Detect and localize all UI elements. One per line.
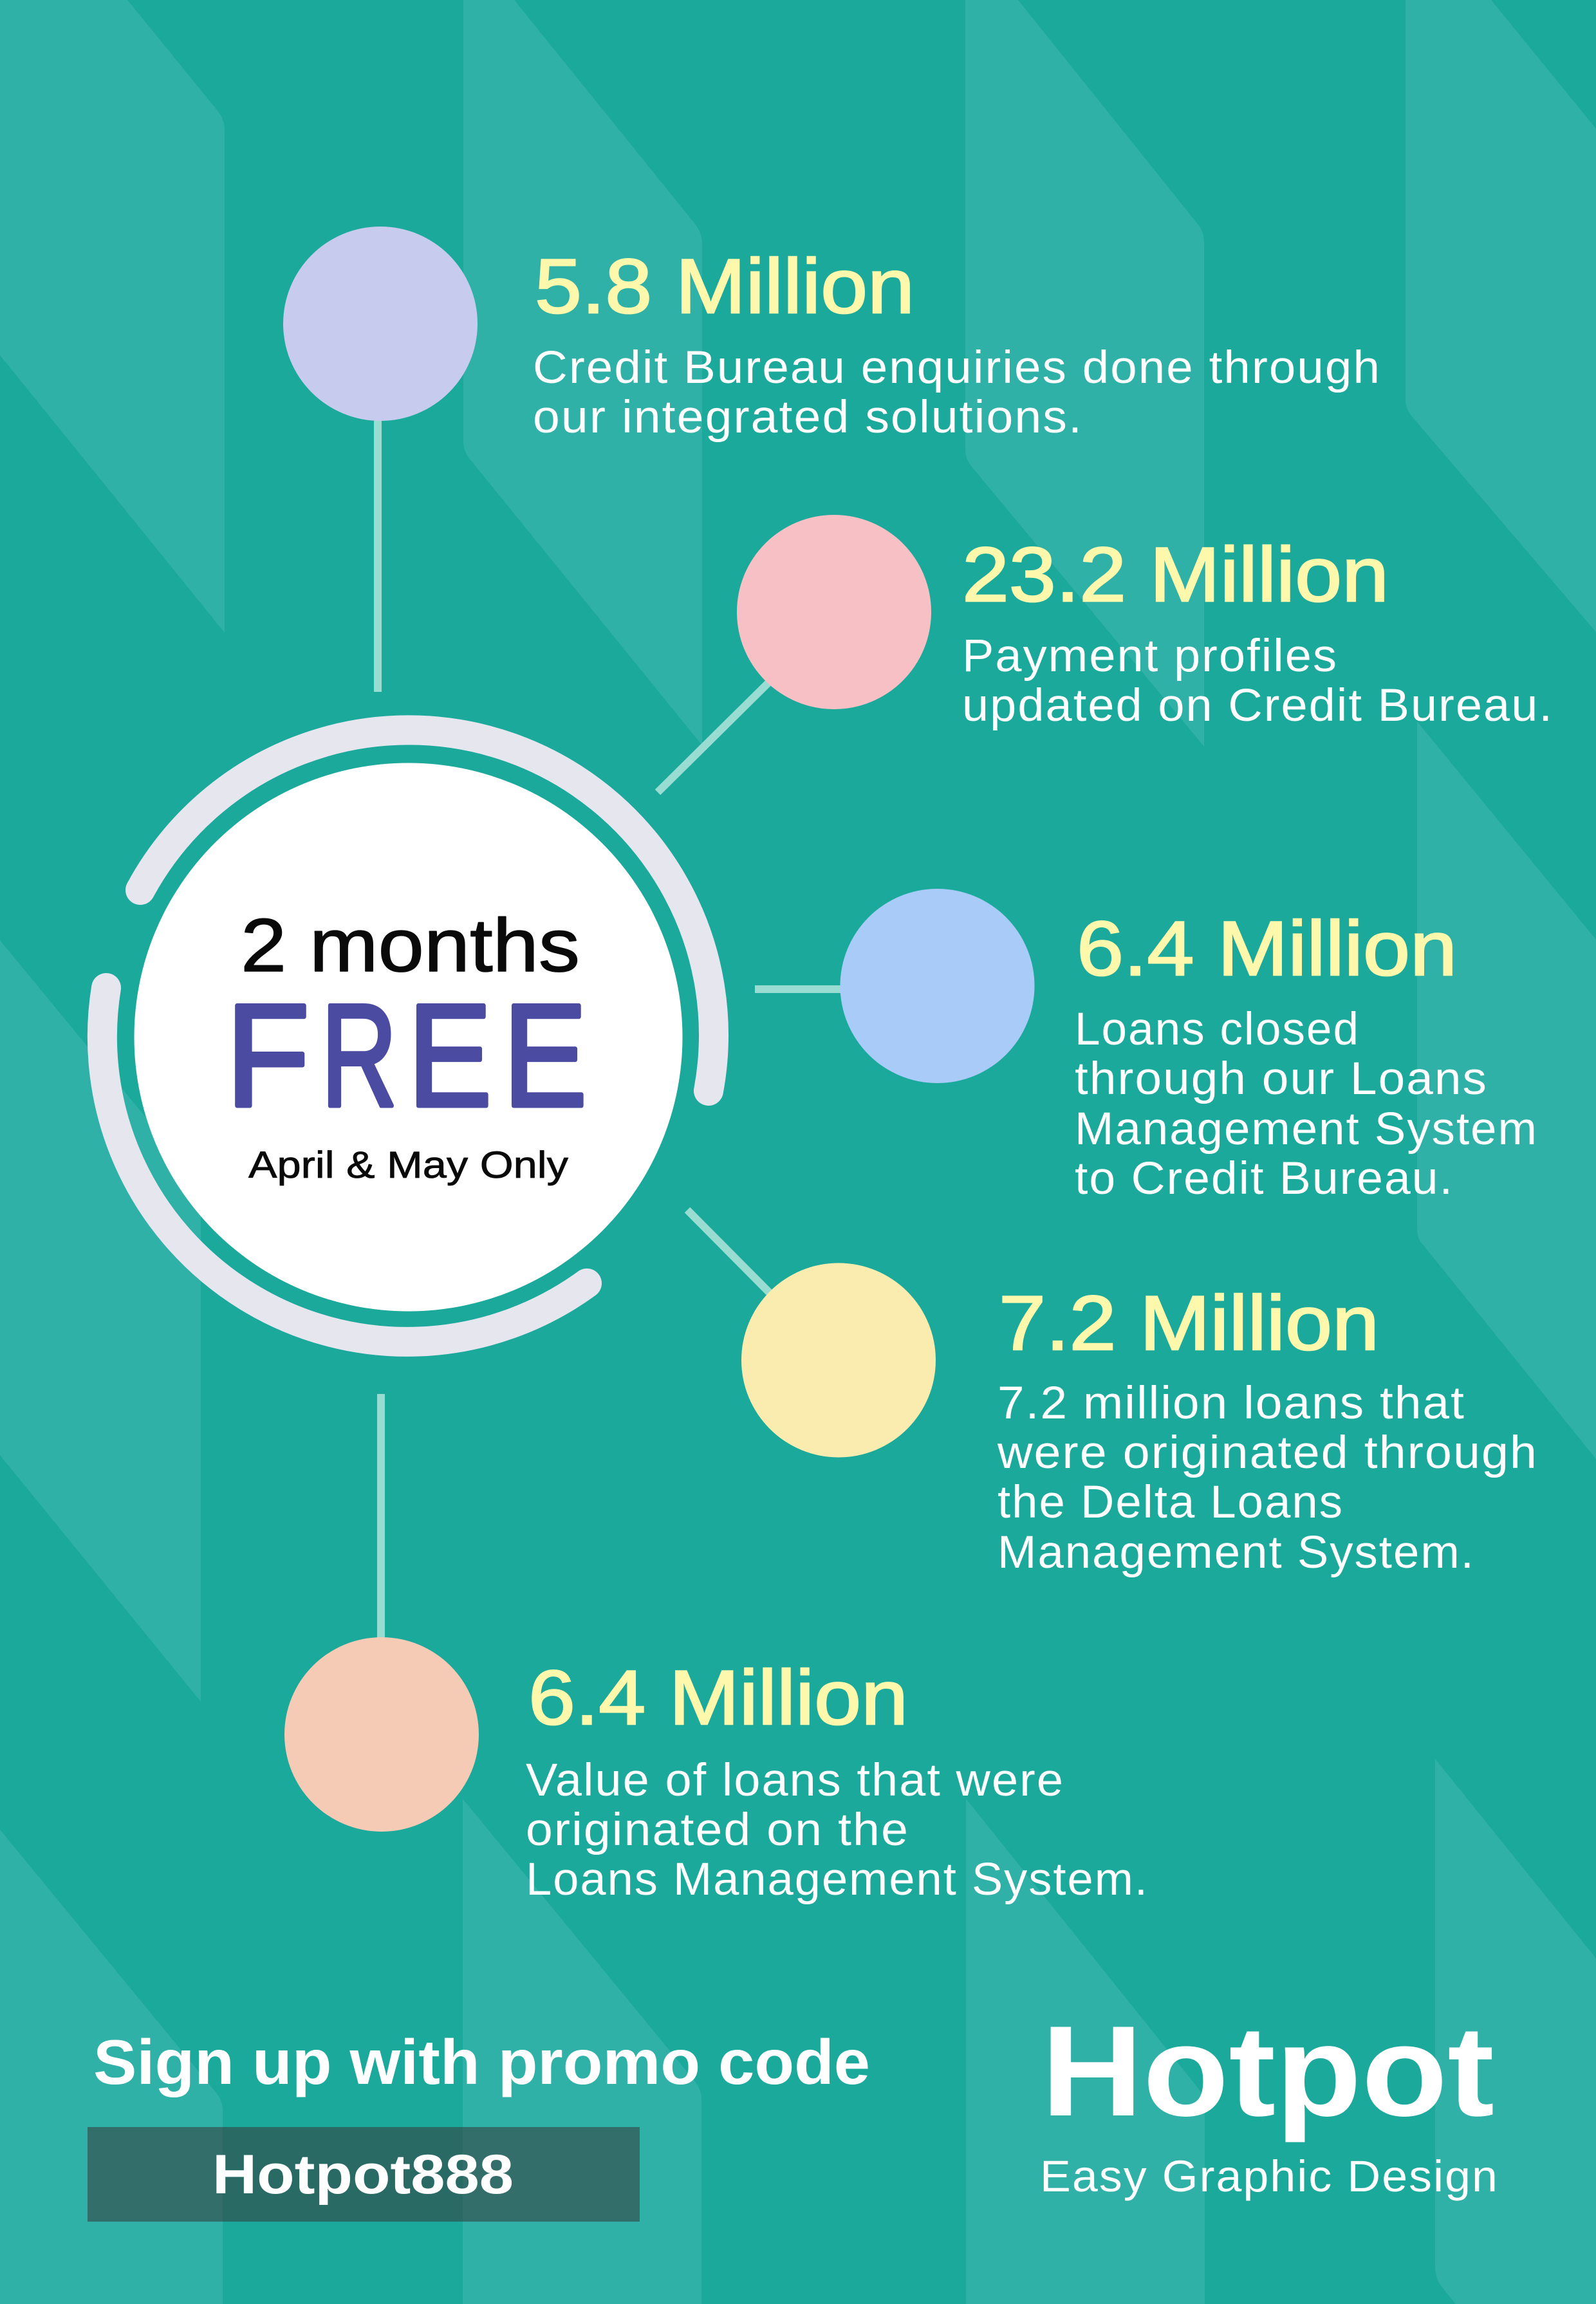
text: FREE: E bbox=[503, 974, 587, 1137]
brand name: Hotpot bbox=[1041, 2000, 1494, 2143]
text: FREE: F bbox=[226, 974, 310, 1137]
text: 2 months: 2 months bbox=[241, 903, 580, 987]
description: the Delta Loans bbox=[998, 1477, 1344, 1528]
description: our integrated solutions. bbox=[533, 392, 1083, 443]
description: updated on Credit Bureau. bbox=[962, 680, 1554, 731]
description: Management System. bbox=[998, 1527, 1475, 1578]
circle: pink bbox=[737, 515, 931, 709]
promo heading: Sign up with promo code bbox=[93, 2027, 870, 2097]
description: Management System bbox=[1075, 1104, 1538, 1155]
description: to Credit Bureau. bbox=[1075, 1153, 1454, 1204]
stat: 7.2 Million bbox=[741, 1263, 1538, 1578]
heading: 6.4 Million bbox=[528, 1655, 908, 1741]
connector line: center to 7.2 Million bbox=[687, 1210, 775, 1299]
brand logo text bbox=[1040, 2000, 1499, 2201]
white disc bbox=[134, 763, 682, 1312]
stat: 23.2 Million bbox=[737, 515, 1554, 731]
connector line: center to 23.2 Million bbox=[658, 676, 775, 792]
connector line: center to 5.8 Million bbox=[374, 412, 382, 692]
circle: blue bbox=[840, 889, 1035, 1083]
description: Loans closed bbox=[1075, 1004, 1360, 1055]
connector line: center to 6.4 Million loans closed bbox=[755, 985, 845, 993]
description: were originated through bbox=[997, 1427, 1538, 1478]
description: originated on the bbox=[526, 1805, 909, 1855]
description: Credit Bureau enquiries done through bbox=[533, 342, 1381, 393]
text: FREE: R bbox=[321, 974, 397, 1137]
circle: yellow bbox=[741, 1263, 936, 1457]
description: Payment profiles bbox=[962, 631, 1338, 682]
heading: 7.2 Million bbox=[999, 1280, 1379, 1366]
description: through our Loans bbox=[1075, 1054, 1488, 1104]
heading: 6.4 Million bbox=[1077, 906, 1457, 992]
stat: 6.4 Million value bbox=[284, 1637, 1149, 1905]
text: FREE: E bbox=[408, 974, 492, 1137]
connector line: center to 6.4 Million value bbox=[377, 1394, 385, 1642]
text: April & May Only: April & May Only bbox=[248, 1144, 568, 1186]
promo code: Hotpot888 bbox=[212, 2144, 514, 2206]
circle: peach bbox=[284, 1637, 479, 1832]
stat: 5.8 Million bbox=[283, 227, 1381, 443]
tagline: Easy Graphic Design bbox=[1040, 2151, 1499, 2201]
description: Loans Management System. bbox=[526, 1854, 1149, 1905]
circle: lavender bbox=[283, 227, 478, 421]
description: Value of loans that were bbox=[526, 1755, 1064, 1806]
heading: 23.2 Million bbox=[962, 532, 1389, 618]
ring arc lower bbox=[102, 988, 587, 1342]
ring arc upper bbox=[140, 730, 714, 1091]
center badge bbox=[102, 730, 714, 1342]
heading: 5.8 Million bbox=[535, 243, 914, 330]
stat: 6.4 Million loans closed bbox=[840, 889, 1538, 1204]
box background bbox=[88, 2127, 640, 2222]
description: 7.2 million loans that bbox=[998, 1378, 1465, 1429]
promo code box bbox=[88, 2127, 640, 2222]
